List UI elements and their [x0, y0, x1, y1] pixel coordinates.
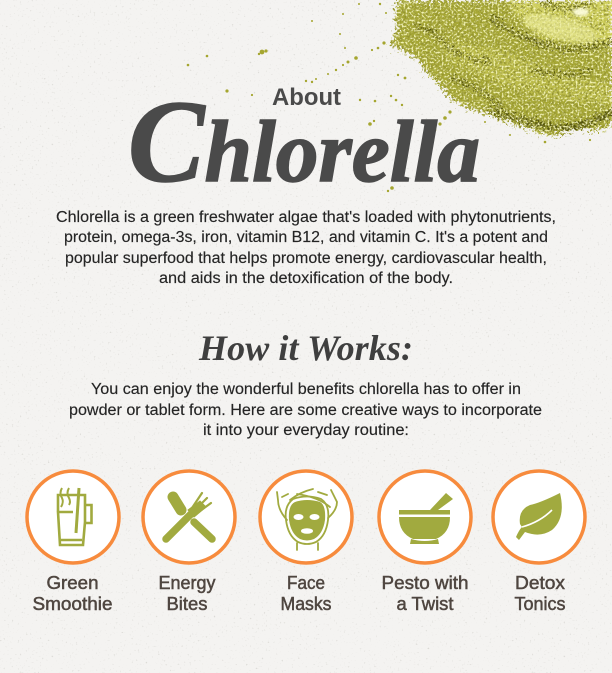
- label: Energy: [158, 572, 216, 593]
- text block: chlorella description: popular superfood that helps promote energy, cardiovascular health,: [65, 250, 547, 267]
- circle badge: [27, 471, 119, 563]
- circle badge: [493, 471, 585, 563]
- text block: how it works intro: powder or tablet form. Here are some creative ways to incorporate: [69, 402, 542, 419]
- icon: crossed knife and fork: [166, 493, 212, 539]
- label: Green: [46, 572, 98, 593]
- heading: About: About: [272, 84, 341, 111]
- label: Tonics: [514, 593, 566, 614]
- circle badge: [260, 471, 352, 563]
- text block: how it works intro: You can enjoy the wonderful benefits chlorella has to offer in: [91, 381, 521, 398]
- item: pesto with a twist: [379, 471, 471, 614]
- label: [382, 572, 468, 614]
- text block: chlorella description: [56, 209, 556, 287]
- label: Bites: [166, 593, 208, 614]
- item: energy bites: [143, 471, 235, 614]
- label: Smoothie: [32, 593, 112, 614]
- text block: how it works intro: [69, 381, 542, 439]
- label: [280, 572, 332, 614]
- text block: chlorella description: Chlorella is a green freshwater algae that's loaded with phytonutrients,: [56, 209, 556, 226]
- label: Pesto with: [382, 572, 468, 593]
- icon: face with mask and towel: [277, 489, 337, 550]
- label: Masks: [280, 593, 332, 614]
- label: [514, 572, 566, 614]
- icon: mortar and pestle: [399, 493, 453, 544]
- circle badge: [379, 471, 471, 563]
- label: [32, 572, 112, 614]
- heading: How it Works: How it Works:: [198, 328, 413, 368]
- icon: leaf: [516, 493, 562, 540]
- text block: chlorella description: and aids in the detoxification of the body.: [159, 270, 453, 287]
- text block: chlorella description: protein, omega-3s, iron, vitamin B12, and vitamin C. It's a potent and: [64, 229, 548, 246]
- heading: Chlorella script title: Chlorella: [128, 76, 480, 207]
- label: [158, 572, 216, 614]
- label: Detox: [515, 572, 566, 593]
- circle badge: [143, 471, 235, 563]
- label: Face: [287, 572, 325, 593]
- item: face masks: [260, 471, 352, 614]
- text block: how it works intro: it into your everyday routine:: [203, 422, 409, 439]
- item: green smoothie: [27, 471, 119, 614]
- image: green chlorella powder pile: [187, 0, 612, 192]
- icon: smoothie glass: [58, 488, 92, 545]
- scattered powder grains: [187, 3, 591, 192]
- item: detox tonics: [493, 471, 585, 614]
- label: a Twist: [396, 593, 454, 614]
